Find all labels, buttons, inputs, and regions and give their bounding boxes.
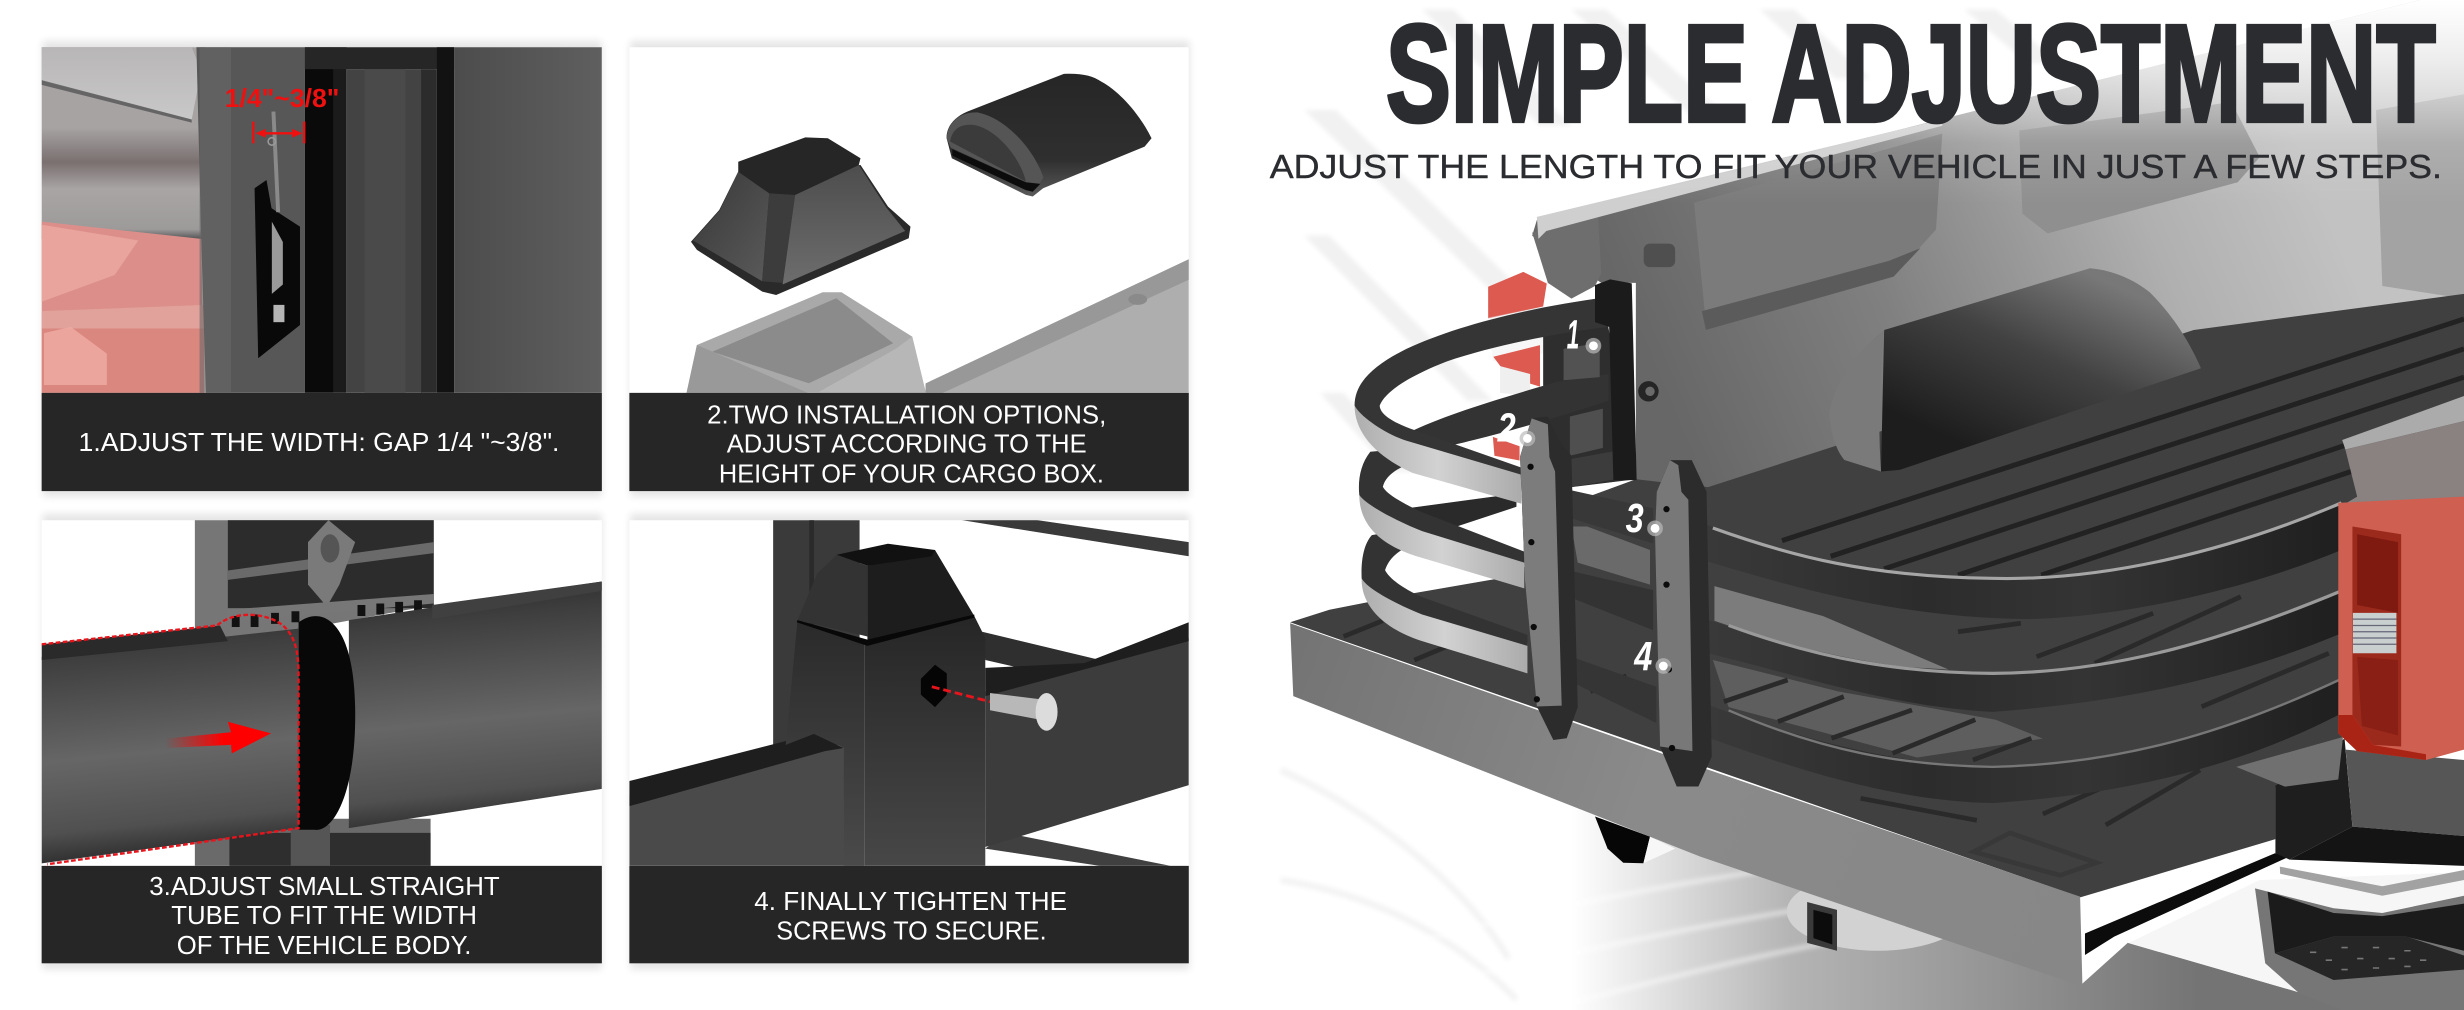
caption text: 2.TWO INSTALLATION OPTIONS, bbox=[707, 399, 1106, 429]
caption text: ADJUST ACCORDING TO THE bbox=[727, 429, 1087, 459]
panel shadows bbox=[42, 41, 1190, 970]
extender arm: lower hidden arm bbox=[1406, 493, 1516, 526]
truck bed wall bbox=[1532, 0, 2464, 490]
dimension label: 1/4"~3/8" bbox=[225, 85, 339, 113]
extender bar: middle bbox=[1359, 448, 2341, 712]
number 1: 1 bbox=[1567, 311, 1579, 357]
number 2: 2 bbox=[1497, 405, 1516, 451]
shadow under tailgate bbox=[1571, 805, 2357, 1010]
product photo: truck bed with extender bbox=[1290, 0, 2464, 1010]
arrow: push direction bbox=[165, 722, 271, 753]
panel: step 1 adjust width bbox=[42, 47, 602, 491]
caption text: HEIGHT OF YOUR CARGO BOX. bbox=[719, 458, 1104, 488]
tail light left bbox=[1488, 272, 1547, 460]
number 4: 4 bbox=[1633, 633, 1653, 679]
number 3: 3 bbox=[1626, 495, 1644, 541]
caption text: 3.ADJUST SMALL STRAIGHT bbox=[149, 871, 500, 901]
tailgate liner details bbox=[1344, 597, 2329, 875]
photo: post, bar and screw bbox=[629, 520, 1189, 866]
dark gap under tailgate bbox=[2085, 737, 2352, 955]
dimension arrow bbox=[253, 122, 304, 143]
number 3 bbox=[1626, 495, 1663, 541]
floor ribs bbox=[1782, 319, 2464, 575]
caption bar bbox=[629, 393, 1189, 491]
tailgate front face bbox=[1290, 623, 2082, 987]
panel: step 2 installation options bbox=[629, 47, 1189, 491]
wheel well bbox=[1829, 268, 2201, 471]
step numbers bbox=[1497, 311, 1671, 679]
truck bed floor bbox=[1290, 294, 2464, 897]
caption bar bbox=[629, 866, 1189, 963]
caption text: 1.ADJUST THE WIDTH: GAP 1/4 "~3/8". bbox=[79, 427, 559, 457]
caption bar bbox=[42, 393, 602, 491]
icon: tapered spacer pad bbox=[691, 137, 910, 295]
panel: step 4 tighten screws bbox=[629, 520, 1189, 963]
photo: gap between bracket and bed rail bbox=[42, 47, 602, 393]
tail light right bbox=[2338, 396, 2464, 760]
subtitle: ADJUST THE LENGTH TO FIT YOUR VEHICLE IN JUST A FEW STEPS. bbox=[1270, 149, 2442, 186]
extender bar: lower bbox=[1362, 530, 2341, 803]
mounting bracket bbox=[1564, 279, 1659, 487]
caption text: OF THE VEHICLE BODY. bbox=[177, 930, 471, 960]
number 1 bbox=[1567, 311, 1601, 357]
bracket backing between arms bbox=[1543, 314, 1636, 487]
panel: step 3 adjust tube bbox=[42, 520, 602, 963]
caption text bbox=[754, 886, 1067, 946]
extender arm: middle upper arm bbox=[1413, 374, 1608, 449]
tire and hitch bbox=[1595, 817, 1969, 951]
icon: faded bed rail bbox=[926, 259, 1189, 393]
caption bar bbox=[42, 866, 602, 963]
caption text: SCREWS TO SECURE. bbox=[776, 916, 1047, 946]
icon: rounded spacer pad bbox=[947, 74, 1152, 196]
icon: faded socket pad bbox=[687, 292, 926, 393]
photo: telescoping straight tube bbox=[42, 520, 602, 866]
photo: two spacer pads bbox=[629, 47, 1189, 393]
vertical upright 2 bbox=[1655, 460, 1712, 787]
caption text bbox=[149, 871, 500, 960]
caption text: TUBE TO FIT THE WIDTH bbox=[171, 900, 477, 930]
caption text: 4. FINALLY TIGHTEN THE bbox=[754, 886, 1067, 916]
number 4 bbox=[1633, 633, 1671, 679]
vertical upright 1 bbox=[1520, 416, 1578, 740]
truck rear right bbox=[2129, 750, 2464, 1010]
number 2 bbox=[1497, 405, 1535, 451]
extender bar: upper bbox=[1355, 297, 2341, 619]
caption text bbox=[707, 399, 1106, 488]
